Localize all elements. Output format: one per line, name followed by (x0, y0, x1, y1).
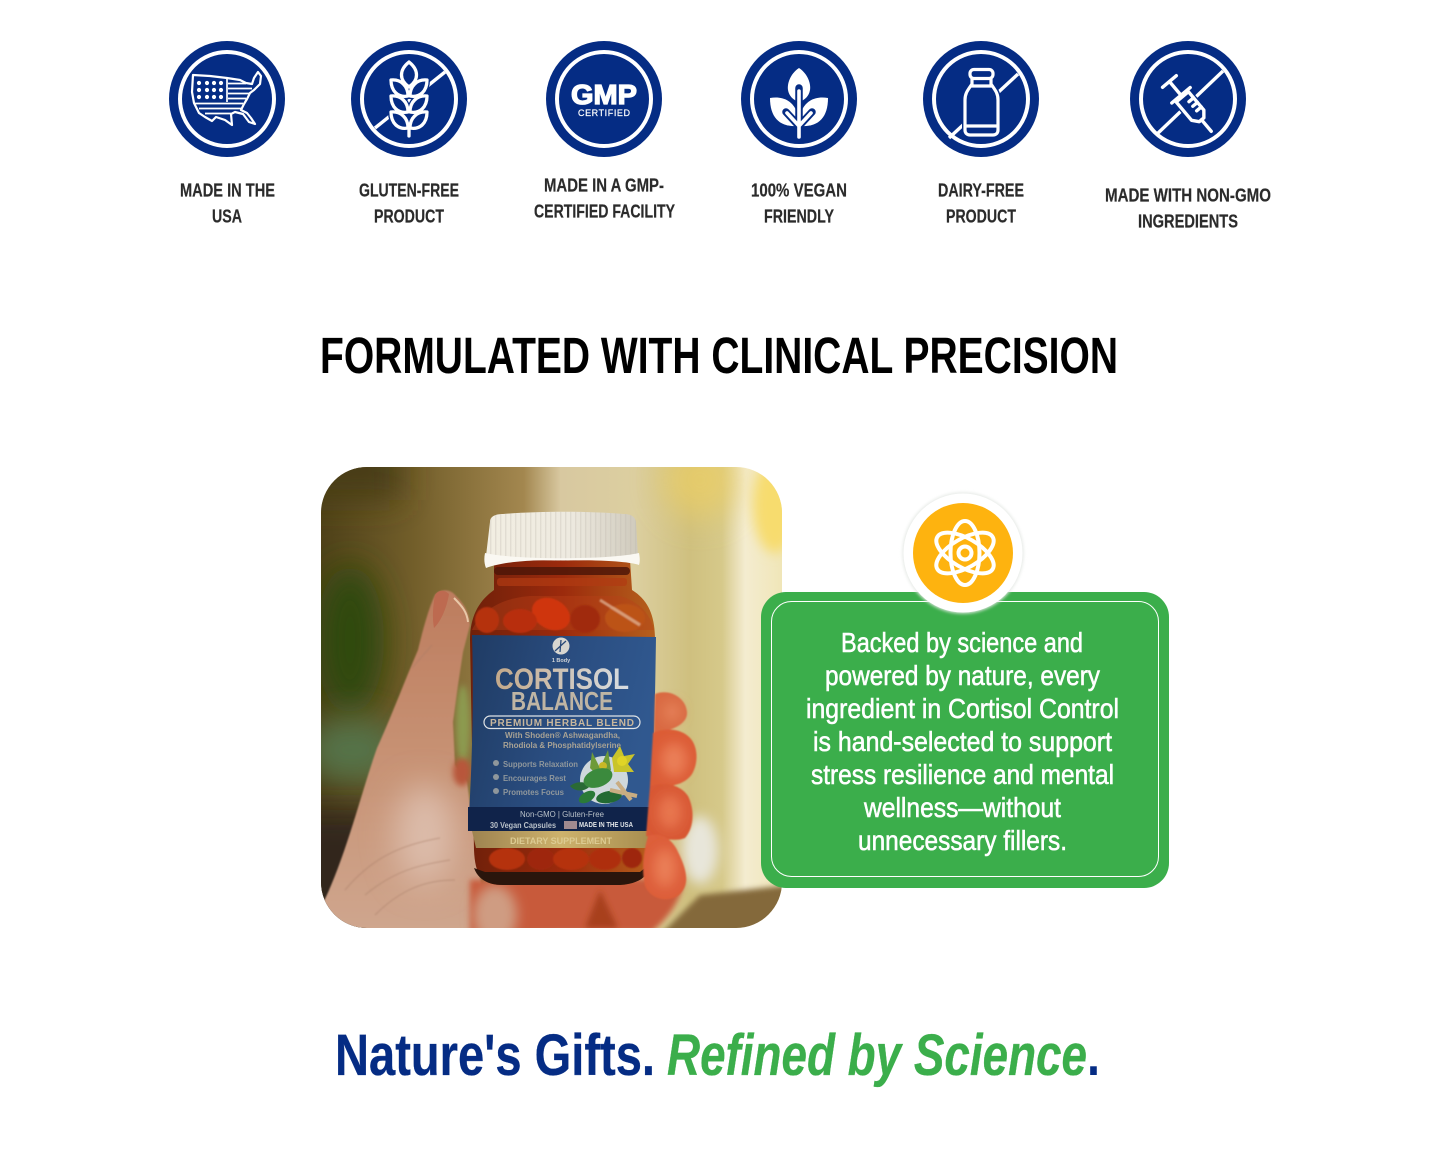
label: non-GMO (1105, 184, 1271, 232)
bottle: Non-GMO | Gluten-Free (520, 810, 605, 819)
icon: GMP certified: CERTIFIED (578, 108, 630, 118)
bottle: 1 Body (552, 658, 571, 664)
label: GMP facility: MADE IN A GMP- (544, 174, 664, 196)
callout text: is hand-selected to support (813, 726, 1112, 757)
label: gluten-free: PRODUCT (374, 206, 445, 226)
bottle: With Shoden® Ashwagandha, (505, 731, 620, 740)
label: dairy-free (938, 180, 1024, 226)
panel: green callout box (761, 592, 1169, 888)
trust badges row (169, 41, 1271, 232)
capsules (475, 591, 645, 870)
label: GMP facility (534, 174, 676, 222)
label: gluten-free: GLUTEN-FREE (359, 180, 459, 200)
badge: gluten-free (351, 41, 467, 226)
fingers (643, 692, 697, 899)
icon: GMP certified: GMP (571, 79, 637, 110)
icon: crossed milk bottle (923, 41, 1039, 157)
tagline (335, 1023, 1100, 1088)
hand (322, 590, 684, 945)
tagline: Nature's Gifts. (335, 1023, 655, 1088)
bottle: 30 Vegan Capsules (490, 821, 556, 830)
panel inner outline (772, 602, 1158, 876)
label: made in the USA: USA (212, 206, 242, 226)
label: made in the USA (180, 180, 275, 226)
callout text (806, 627, 1119, 856)
bottle (468, 512, 656, 885)
glass body (470, 560, 655, 885)
label: dairy-free: PRODUCT (946, 206, 1017, 226)
bottle: Promotes Focus (503, 788, 565, 797)
label: non-GMO: MADE WITH NON-GMO (1105, 184, 1271, 206)
tagline: . (1087, 1023, 1100, 1088)
bottle: DIETARY SUPPLEMENT (510, 836, 612, 846)
label: vegan: 100% VEGAN (751, 180, 847, 200)
photo background (321, 467, 782, 928)
badge: vegan (741, 41, 857, 226)
callout text: wellness—without (863, 792, 1061, 823)
bottle: BALANCE (511, 686, 613, 716)
tagline: Refined by Science (667, 1023, 1087, 1088)
heading: FORMULATED WITH CLINICAL PRECISION (320, 327, 1118, 384)
icon: crossed wheat (351, 41, 467, 157)
label: GMP facility: CERTIFIED FACILITY (534, 200, 676, 222)
label (469, 635, 656, 807)
badge: non-GMO (1105, 41, 1271, 232)
product photo (321, 467, 782, 928)
icon: crossed syringe (1130, 41, 1246, 157)
bottle: MADE IN THE USA (579, 820, 633, 829)
label: dairy-free: DAIRY-FREE (938, 180, 1024, 200)
label: vegan (751, 180, 847, 226)
callout text: Backed by science and (841, 627, 1083, 658)
callout text: unnecessary fillers. (858, 825, 1067, 856)
bottle: PREMIUM HERBAL BLEND (490, 718, 634, 729)
icon: vegan leaves (741, 41, 857, 157)
icon: USA flag map (169, 41, 285, 157)
herb illustration (570, 746, 637, 806)
callout text: stress resilience and mental (811, 759, 1114, 790)
cap (486, 512, 638, 560)
label: vegan: FRIENDLY (764, 206, 835, 226)
badge: dairy-free (923, 41, 1039, 226)
label: gluten-free (359, 180, 459, 226)
icon: atom badge (902, 492, 1024, 614)
bottle: Rhodiola & Phosphatidylserine (503, 741, 622, 750)
label: non-GMO: INGREDIENTS (1138, 210, 1238, 232)
callout text: powered by nature, every (825, 660, 1100, 691)
icon: GMP certified (546, 41, 662, 157)
badge: made in the USA (169, 41, 285, 226)
badge: GMP certified (534, 41, 676, 222)
bottle: CORTISOL (495, 663, 629, 696)
label: made in the USA: MADE IN THE (180, 180, 275, 200)
callout text: ingredient in Cortisol Control (806, 693, 1119, 724)
bottle: Encourages Rest (503, 774, 566, 783)
callout panel (761, 492, 1169, 888)
bottle: Supports Relaxation (503, 760, 578, 769)
